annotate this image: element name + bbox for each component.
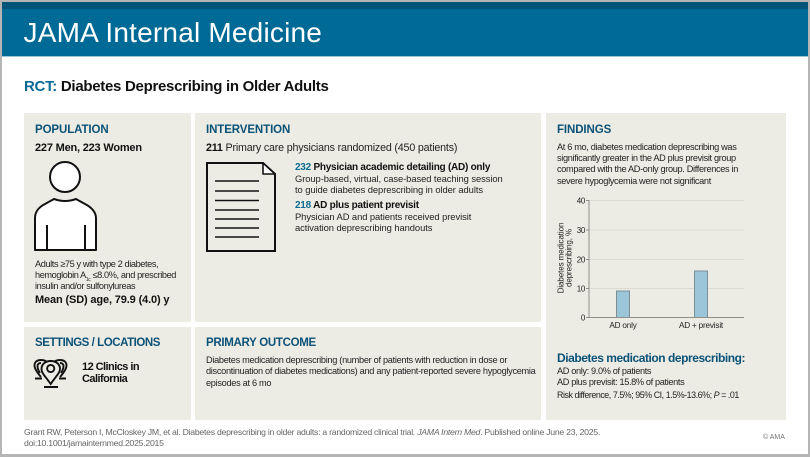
eligibility text: Adults ≥75 y with type 2 diabetes, [35, 258, 158, 268]
main title: RCT: Diabetes Deprescribing in Older Adults [24, 78, 329, 95]
sample size: 227 Men, 223 Women [35, 142, 142, 154]
panel: findings [546, 113, 786, 420]
bar chart: 20 [577, 256, 586, 264]
findings summary: compared with the AD-only group. Differences in [557, 164, 738, 174]
heading: intervention: INTERVENTION [206, 124, 290, 136]
copyright: © AMA [763, 434, 785, 441]
citation: doi:10.1001/jamainternmed.2025.2015 [24, 438, 164, 448]
bar chart [556, 196, 744, 330]
findings summary: At 6 mo, diabetes medication deprescribing was [557, 142, 736, 152]
clinic count: 12 Clinics in [82, 360, 139, 372]
heading: settings / locations: SETTINGS / LOCATIONS [35, 337, 160, 349]
findings summary: severe hypoglycemia were not significant [557, 176, 711, 186]
result values [557, 366, 684, 387]
bar chart: Diabetes medication [556, 223, 566, 293]
bar: AD only [616, 291, 630, 318]
arm: academic detailing only [295, 162, 503, 195]
result values: AD plus previsit: 15.8% of patients [557, 377, 684, 387]
citation: Grant RW, Peterson I, McCloskey JM, et al. Diabetes deprescribing in older adults: a randomized clinical trial. JAMA Intern Med. Published online June 23, 2025. [24, 426, 600, 436]
arm: AD plus patient previsit: 218 AD plus patient previsit [295, 200, 419, 210]
journal title: JAMA Internal Medicine [24, 17, 322, 48]
icon: document [206, 162, 276, 252]
clinic count [82, 360, 139, 385]
panel: settings / locations [24, 327, 191, 420]
arm: academic detailing only: 232 Physician academic detailing (AD) only [295, 162, 490, 172]
arm: academic detailing only: to guide diabetes deprescribing in older adults [295, 184, 483, 195]
eligibility text: hemoglobin A1c ≤8.0%, and prescribed [35, 270, 176, 283]
randomization count: 211 Primary care physicians randomized (450 patients) [206, 142, 457, 154]
bar chart: 30 [577, 226, 586, 235]
icon: map pins [34, 359, 68, 388]
outcome description [206, 355, 536, 388]
outcome description: Diabetes medication deprescribing (number of patients with reduction in dose or [206, 355, 507, 365]
header band [2, 2, 808, 57]
result subheading: Diabetes medication deprescribing: [557, 351, 745, 365]
findings summary [557, 142, 738, 186]
bar chart: 10 [577, 284, 586, 294]
result values: AD only: 9.0% of patients [557, 366, 651, 376]
panel: population [24, 113, 191, 322]
arm: AD plus patient previsit: activation deprescribing handouts [295, 222, 432, 233]
heading: population: POPULATION [35, 124, 109, 136]
eligibility text: insulin and/or sulfonylureas [35, 281, 135, 291]
mean age: Mean (SD) age, 79.9 (4.0) y [35, 294, 169, 306]
citation [24, 426, 600, 448]
outcome description: episodes at 6 mo [206, 378, 271, 388]
icon: person [34, 161, 97, 251]
bar: AD + previsit [694, 271, 708, 318]
bar chart: AD only [609, 321, 638, 330]
eligibility text [35, 258, 176, 291]
heading: primary outcome: PRIMARY OUTCOME [206, 337, 316, 349]
arm: academic detailing only: Group-based, virtual, case-based teaching session [295, 173, 503, 184]
findings summary: significantly greater in the AD plus previsit group [557, 153, 736, 163]
outcome description: discontinuation of diabetes medications) and any patient-reported severe hypoglycemia [206, 366, 535, 376]
bar chart: deprescribing, % [564, 229, 574, 287]
clinic count: California [82, 373, 127, 385]
arm: AD plus patient previsit [295, 200, 472, 233]
panel: primary outcome [195, 327, 541, 420]
bar chart: AD + previsit [679, 321, 724, 330]
heading: findings: FINDINGS [557, 124, 611, 136]
panel: intervention [195, 113, 541, 322]
risk difference: Risk difference, 7.5%; 95% CI, 1.5%-13.6%; P = .01 [557, 390, 739, 400]
arm: AD plus patient previsit: Physician AD and patients received previsit [295, 211, 471, 222]
bar chart: 0 [581, 314, 586, 322]
bar chart: 40 [577, 196, 586, 206]
